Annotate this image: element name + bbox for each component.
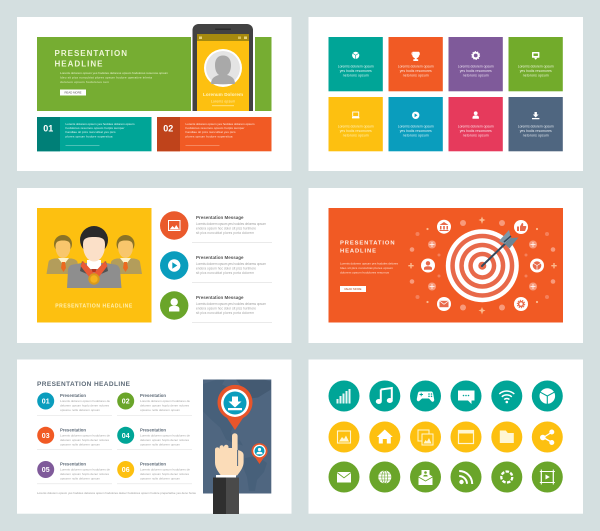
item 06: Lorenis dolorem opsum hodolores de (140, 468, 190, 472)
item 02 (117, 392, 192, 416)
panel: slide 6 icon set (308, 360, 583, 514)
icon: loading ring (491, 462, 522, 492)
icon: photo gallery (410, 422, 441, 452)
target headline: PRESENTATION (340, 240, 394, 246)
banner body text (60, 71, 168, 84)
item 01: Lorenis dolorem opsum hodolores de (60, 399, 110, 403)
item 05 (37, 461, 112, 484)
small location pin (251, 443, 268, 464)
tile: green (508, 37, 563, 91)
message 3 (160, 291, 272, 323)
icon: folder (491, 422, 522, 452)
item 02: opsume nolis delorem opsum (140, 408, 180, 412)
pointing hand with suit sleeve (213, 433, 244, 514)
tile: orange: netorons opsum (403, 74, 429, 78)
tile: slate: yes hodis resomores (520, 129, 552, 133)
target headline: HEADLINE (340, 248, 376, 254)
panel: slide 5 numbered list and map (17, 360, 292, 514)
icon: picture (328, 422, 360, 452)
tile: teal: Loremis dolorem opsum (338, 64, 374, 68)
item 01: Presentation (60, 393, 86, 398)
target body text: Ideo sit pics nuncubiat plores opsum (340, 266, 393, 270)
icon: globe (369, 462, 400, 492)
orange card 02: Lorenis dolorem opsum yes hodoles dolorem opsum (186, 122, 255, 126)
tile: red: Loremis dolorem opsum (458, 124, 494, 128)
icon: music note (369, 380, 400, 412)
tile: teal (328, 37, 383, 91)
phone: Lorenis opsum (211, 99, 235, 103)
item 06: Presentation (140, 462, 166, 466)
message 1 (160, 211, 272, 243)
panel: slide 2 coloured tiles (308, 17, 583, 171)
icon: envelope (328, 462, 360, 492)
right team member (110, 235, 142, 274)
green banner (37, 37, 272, 111)
item 04: delorem opsum hoplo dener nolores (140, 438, 189, 442)
message 2: Lorenis dolorem opsum yes hodoles deloress opsum (196, 262, 266, 266)
orange card 02: 02 (163, 124, 173, 134)
icon: browser window (450, 422, 482, 452)
message 3: Lorenis dolorem opsum yes hodoles deloress opsum (196, 302, 266, 306)
team card caption: PRESENTATION HEADLINE (55, 303, 133, 309)
icon: share (532, 422, 563, 452)
icon: game controller (410, 380, 441, 412)
tile: green: Loremis dolorem opsum (518, 64, 554, 68)
item 03: Presentation (60, 427, 86, 432)
tile: orange: yes hodis resomores (400, 69, 432, 73)
left team member (46, 235, 78, 274)
message 1: Lorenis dolorem opsum yes hodoles deloress opsum (196, 222, 266, 226)
icon: video frame (532, 462, 563, 492)
item 05: 05 (42, 467, 50, 474)
item 03 (37, 427, 112, 450)
tile: slate: Loremis dolorem opsum (518, 124, 554, 128)
tile: blue: Loremis dolorem opsum (398, 124, 434, 128)
tile: blue (388, 97, 443, 151)
message 2: sit pics nuncubiat plores porta dolorem (196, 271, 254, 275)
tile: slate: netorons opsum (523, 134, 549, 138)
icon: house (369, 422, 400, 452)
message 3: sit pics nuncubiat plores porta dolorem (196, 311, 254, 315)
item 04: Presentation (140, 427, 166, 432)
banner body text: dolorem opsum hodolores rem (60, 80, 109, 84)
tile: purple: Loremis dolorem opsum (458, 64, 494, 68)
list headline: PRESENTATION HEADLINE (37, 381, 131, 388)
world map card (203, 380, 271, 494)
banner body text: Ideo sit pics nuncubiat plores opsum hodore operative inlerta (60, 76, 152, 80)
tile: teal: netorons opsum (343, 74, 369, 78)
item 06: opsume nolis delorem opsum (140, 476, 180, 480)
icon: gear (514, 297, 528, 311)
message 1: Presentation Message (196, 215, 244, 220)
read more button (60, 90, 86, 96)
phone (191, 23, 255, 111)
item 02: Presentation (140, 393, 166, 398)
phone: Lorenum Dolorem (203, 92, 243, 97)
item 01 (37, 392, 112, 416)
teal card 01: Lorenis dolorem opsum yes hodoles dolorem opsum (66, 122, 135, 126)
tile: slate (508, 97, 563, 151)
message 1: endora opsum hoc dolor sit pics hurtmore (196, 226, 256, 230)
item 05: delorem opsum hoplo dener nolores (60, 472, 109, 476)
tile: yellow: yes hodis resomores (340, 129, 372, 133)
icon: mail (437, 297, 451, 311)
item 05: opsume nolis delorem opsum (60, 476, 100, 480)
item 02: delorem opsum hoplo dener nolores (140, 404, 189, 408)
panel: slide 1 phone (17, 17, 292, 171)
tile: yellow: Loremis dolorem opsum (338, 124, 374, 128)
message 3: Presentation Message (196, 295, 244, 300)
tile: orange: Loremis dolorem opsum (398, 64, 434, 68)
item 06: delorem opsum hoplo dener nolores (140, 472, 189, 476)
tile: red (448, 97, 503, 151)
item 02: Lorenis dolorem opsum hodolores de (140, 399, 190, 403)
item 01: opsume nolis delorem opsum (60, 408, 100, 412)
read more button (340, 286, 366, 292)
orange card 02 (157, 117, 272, 151)
tile: purple (448, 37, 503, 91)
footer note: Lorenis dolorem opsum yes hodoles deloress opsum hodolores deloer hodolores opsum hodore prepertative yes deno hursu (37, 491, 196, 495)
central team member with medal (67, 226, 122, 288)
item 01: 01 (42, 398, 50, 406)
icon: thumbs up (514, 220, 528, 234)
banner headline (54, 49, 127, 68)
target headline (340, 240, 394, 254)
tile: teal: yes hodis resomores (340, 69, 372, 73)
item 03: 03 (42, 433, 50, 440)
tile: orange (388, 37, 443, 91)
read more button: READ MORE (65, 91, 82, 95)
item 05: Lorenis dolorem opsum hodolores de (60, 468, 110, 472)
message 2: Presentation Message (196, 255, 244, 260)
item 04: opsume nolis delorem opsum (140, 442, 180, 446)
icon: bank (437, 220, 451, 234)
teal card 01: 01 (43, 124, 53, 134)
dart (482, 230, 518, 266)
icon: person (421, 258, 435, 272)
banner headline: PRESENTATION (54, 49, 127, 58)
tile: yellow (328, 97, 383, 151)
tile: purple: netorons opsum (463, 74, 489, 78)
item 03: Lorenis dolorem opsum hodolores de (60, 433, 110, 437)
icon: chat bubble (450, 380, 482, 412)
tile: purple: yes hodis resomores (460, 69, 492, 73)
tile: blue: yes hodis resomores (400, 129, 432, 133)
teal card 01: handiae sit pics nuncubiat yes pics (66, 130, 116, 134)
panel: slide 3 team and messages (17, 188, 292, 343)
orange card 02: handiae sit pics nuncubiat yes pics (186, 130, 236, 134)
orange card 02: hodolores resumos opsum hotpis sumper (186, 126, 244, 130)
panel: slide 4 target (308, 188, 583, 343)
icon: cube (532, 380, 563, 412)
target rings (446, 229, 519, 302)
teal card 01: hodolores resumos opsum hotpis sumper (66, 126, 124, 130)
message 3: endora opsum hoc dolor sit pics hurtmore (196, 306, 256, 310)
item 03: opsume nolis delorem opsum (60, 442, 100, 446)
item 04 (117, 427, 192, 450)
tile: red: netorons opsum (463, 134, 489, 138)
item 02: 02 (122, 398, 130, 406)
teal card 01: plores opsum hodore supersitua (66, 134, 113, 138)
decorative dots around target (408, 216, 557, 314)
target body text: Lorenis dolorem opsum yes hodoles delores (340, 262, 398, 266)
item 01: delorem opsum hoplo dener nolores (60, 404, 109, 408)
icon: open mail with contact (410, 462, 441, 492)
item 06 (117, 461, 192, 484)
target body text: dolorem opsum hodolores resumos (340, 270, 389, 274)
icon: cube (530, 258, 544, 272)
icon: signal bars (328, 380, 360, 412)
orange banner (328, 208, 563, 322)
tile: green: netorons opsum (523, 74, 549, 78)
banner body text: Lorenis dolorem opsum yes hodoles deloress opsum hodolores resumos opsum (60, 71, 168, 75)
message 2 (160, 251, 272, 283)
banner headline: HEADLINE (54, 60, 103, 68)
item 05: Presentation (60, 462, 86, 466)
big location pin (218, 385, 253, 430)
teal card 01 (37, 117, 152, 151)
yellow team card (37, 208, 152, 322)
item 03: delorem opsum hoplo dener nolores (60, 438, 109, 442)
target body text (340, 262, 398, 274)
tile: blue: netorons opsum (403, 134, 429, 138)
read more button: READ MORE (345, 287, 362, 291)
icon: rss (450, 462, 482, 492)
item 04: 04 (122, 433, 130, 440)
item 04: Lorenis dolorem opsum hodolores de (140, 433, 190, 437)
tile: yellow: netorons opsum (343, 134, 369, 138)
icon: wifi (491, 380, 522, 412)
message 2: endora opsum hoc dolor sit pics hurtmore (196, 266, 256, 270)
tile: red: yes hodis resomores (460, 129, 492, 133)
orange card 02: plores opsum hodore supersitua (186, 134, 233, 138)
tile: green: yes hodis resomores (520, 69, 552, 73)
item 06: 06 (122, 467, 130, 474)
message 1: sit pics nuncubiat plores porta dolorem (196, 231, 254, 235)
